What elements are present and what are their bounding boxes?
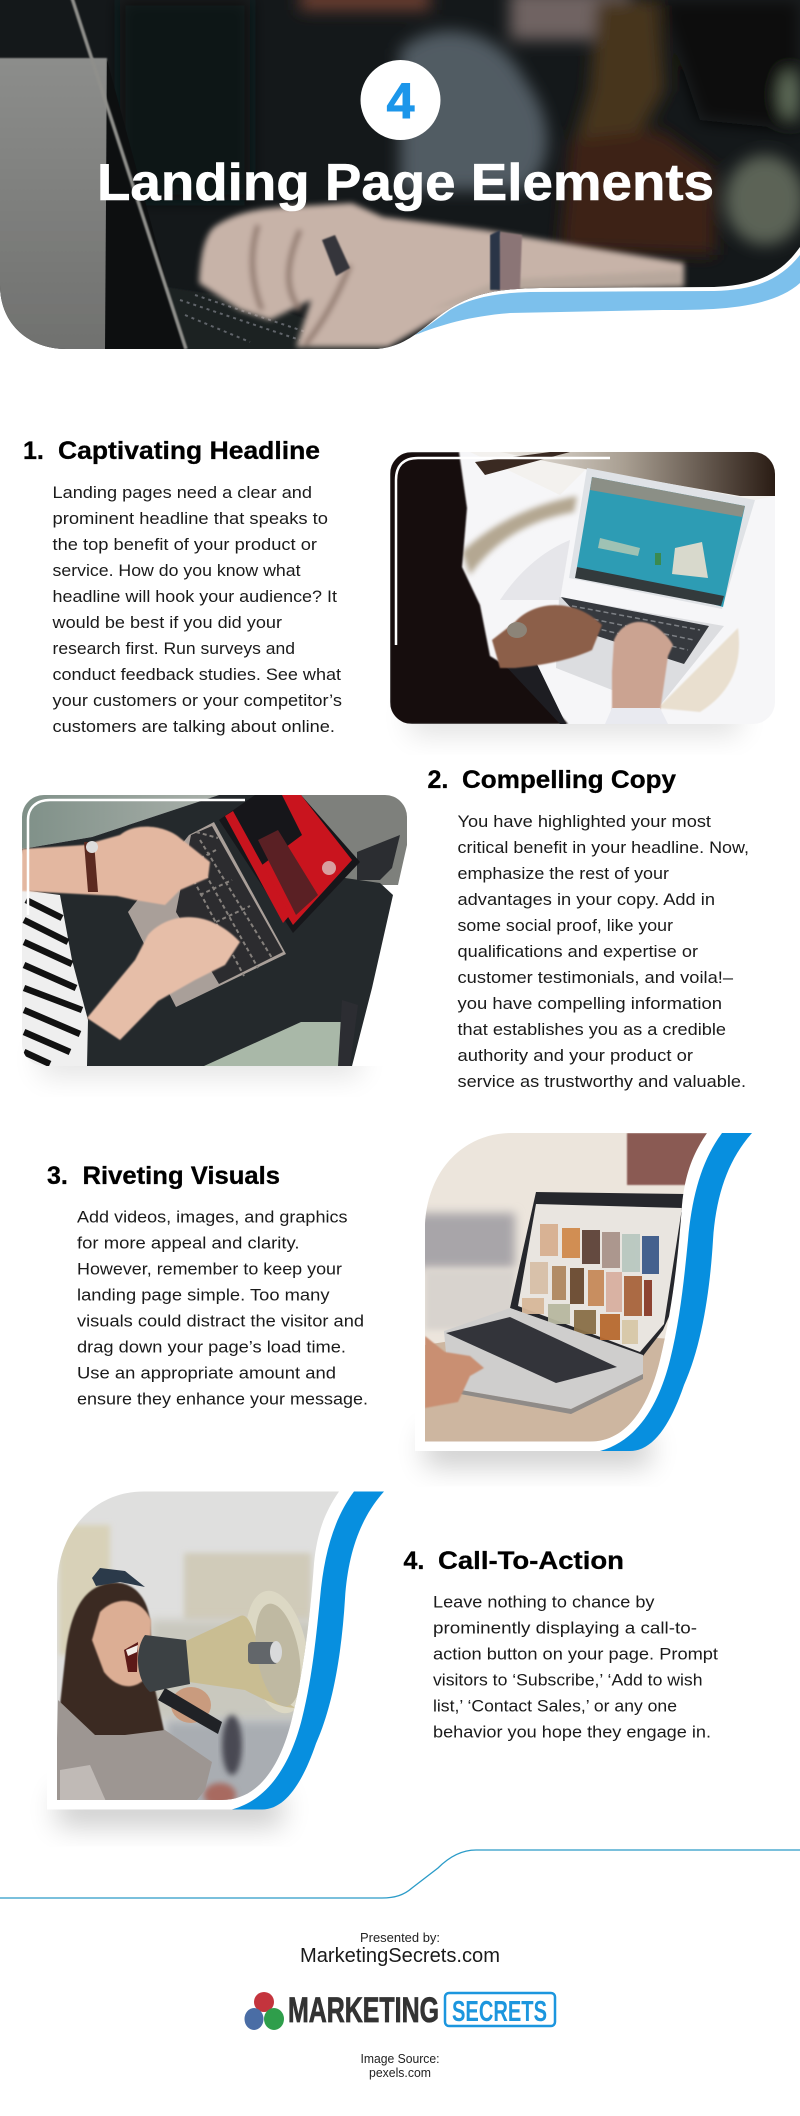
- body text 2: [458, 813, 749, 1091]
- body text 3: visuals could distract the visitor and: [77, 1312, 364, 1330]
- section 1: captivating headline: [23, 437, 775, 736]
- gray floor: [290, 795, 407, 885]
- presented by: Presented by:: [360, 1930, 440, 1945]
- body text 1: Landing pages need a clear and: [52, 484, 312, 502]
- laptop base: [444, 1308, 643, 1409]
- laptop screen: [569, 468, 755, 609]
- megaphone handle: [158, 1688, 222, 1734]
- body text 4: behavior you hope they engage in.: [433, 1724, 711, 1742]
- photo 1: woman typing on laptop: [390, 452, 775, 734]
- body text 2: authority and your product or: [458, 1047, 694, 1065]
- photo 2: laptop on lap: [22, 795, 407, 1076]
- hand: [425, 1336, 484, 1408]
- body text 1: service. How do you know what: [52, 562, 301, 580]
- hero photo: hands on laptop: [0, 0, 800, 358]
- body text 1: headline will hook your audience? It: [52, 588, 337, 606]
- image source: Image Source:: [360, 2051, 440, 2066]
- photo 3: laptop with image gallery: [415, 1133, 752, 1466]
- photo 4: woman with megaphone: [47, 1490, 384, 1826]
- dark pants: [22, 795, 393, 1066]
- body text 1: customers are talking about online.: [52, 718, 335, 736]
- logo badge: [445, 1993, 555, 2028]
- lower jacket and hair: [390, 452, 568, 724]
- shoe: [357, 835, 400, 880]
- upper arm and hand: [22, 827, 210, 905]
- megaphone body: [138, 1635, 190, 1692]
- body text 4: visitors to ‘Subscribe,’ ‘Add to wish: [433, 1672, 702, 1690]
- horn bell: [237, 1586, 317, 1718]
- section 4: call-to-action: [47, 1490, 718, 1826]
- heading 2: Compelling Copy: [462, 766, 676, 794]
- jacket: [57, 1700, 212, 1800]
- body text 1: prominent headline that speaks to: [52, 510, 328, 528]
- body text 2: advantages in your copy. Add in: [458, 891, 715, 909]
- body text 3: ensure they enhance your message.: [77, 1390, 368, 1408]
- body text 2: critical benefit in your headline. Now,: [458, 839, 749, 857]
- section 3: riveting visuals: [47, 1133, 752, 1466]
- number badge: 4: [387, 73, 415, 129]
- striped shirt: [22, 890, 88, 1066]
- hair: [59, 1582, 165, 1735]
- logo wordmark: MARKETING: [288, 1991, 439, 2030]
- body text 1: the top benefit of your product or: [52, 536, 318, 554]
- body text 2: customer testimonials, and voila!–: [458, 969, 734, 987]
- watch: [84, 842, 98, 892]
- heading 1: Captivating Headline: [58, 437, 320, 465]
- heading 2: 2.: [428, 766, 448, 794]
- title: Landing Page Elements: [97, 154, 714, 212]
- hero keyboard: [165, 287, 383, 352]
- footer: [244, 1930, 555, 2080]
- table: [425, 1338, 665, 1442]
- sage cushion: [22, 795, 219, 849]
- body text 3: for more appeal and clarity.: [77, 1234, 300, 1252]
- light blue wave: [415, 255, 800, 335]
- body text 2: You have highlighted your most: [458, 813, 711, 831]
- section 2: compelling copy: [22, 766, 749, 1091]
- image source: [360, 2051, 440, 2080]
- body text 1: your customers or your competitor’s: [52, 692, 342, 710]
- hero bracelet: [497, 232, 522, 290]
- body text 2: service as trustworthy and valuable.: [458, 1073, 746, 1091]
- hero ring: [322, 235, 350, 276]
- body text 3: drag down your page’s load time.: [77, 1338, 346, 1356]
- table edge: [658, 628, 739, 712]
- logo: [244, 1991, 555, 2030]
- laptop base: [556, 597, 724, 708]
- logo icon: [244, 1992, 284, 2030]
- window band: [470, 452, 775, 500]
- heading 4: 4.: [404, 1547, 424, 1575]
- laptop base: [128, 822, 286, 1007]
- body text 4: prominently displaying a call-to-: [433, 1620, 697, 1638]
- hero laptop lid: [0, 58, 107, 358]
- body text 2: qualifications and expertise or: [458, 943, 699, 961]
- hero hands: [199, 203, 684, 347]
- body text 4: action button on your page. Prompt: [433, 1646, 718, 1664]
- body text 4: list,’ ‘Contact Sales,’ or any one: [433, 1698, 677, 1716]
- body text 3: [77, 1208, 368, 1408]
- lower arm and hand: [87, 917, 240, 1040]
- body text 2: some social proof, like your: [458, 917, 674, 935]
- heading 1: 1.: [23, 437, 44, 465]
- hands: [492, 605, 602, 668]
- body text 1: would be best if you did your: [51, 614, 283, 632]
- heading 4: Call-To-Action: [438, 1547, 624, 1575]
- body text 4: Leave nothing to chance by: [433, 1594, 655, 1612]
- laptop screen: [510, 1192, 686, 1356]
- heading 3: 3.: [47, 1162, 68, 1190]
- body text 2: that establishes you as a credible: [458, 1021, 726, 1039]
- blue swoosh: [232, 1492, 384, 1810]
- site name: MarketingSecrets.com: [300, 1945, 500, 1967]
- body text 1: research first. Run surveys and: [52, 640, 295, 658]
- body text 3: Use an appropriate amount and: [77, 1364, 336, 1382]
- body text 2: you have compelling information: [458, 995, 722, 1013]
- laptop screen: [219, 795, 360, 933]
- blue swoosh: [600, 1133, 752, 1451]
- footer divider line: [0, 1850, 800, 1898]
- heading 3: Riveting Visuals: [82, 1162, 280, 1190]
- body text 2: emphasize the rest of your: [458, 865, 670, 883]
- number badge: [360, 60, 440, 140]
- body text 4: [433, 1594, 718, 1742]
- sunglasses: [92, 1568, 145, 1587]
- hand: [171, 1687, 211, 1723]
- logo badge: SECRETS: [452, 1996, 547, 2028]
- face: [92, 1601, 151, 1686]
- body text 3: Add videos, images, and graphics: [77, 1208, 348, 1226]
- horn: [184, 1615, 296, 1708]
- body text 3: landing page simple. Too many: [77, 1286, 330, 1304]
- body text 3: However, remember to keep your: [77, 1260, 343, 1278]
- header banner: [0, 0, 800, 358]
- body text 1: conduct feedback studies. See what: [52, 666, 341, 684]
- image source: pexels.com: [369, 2065, 431, 2080]
- body text 1: [51, 484, 342, 736]
